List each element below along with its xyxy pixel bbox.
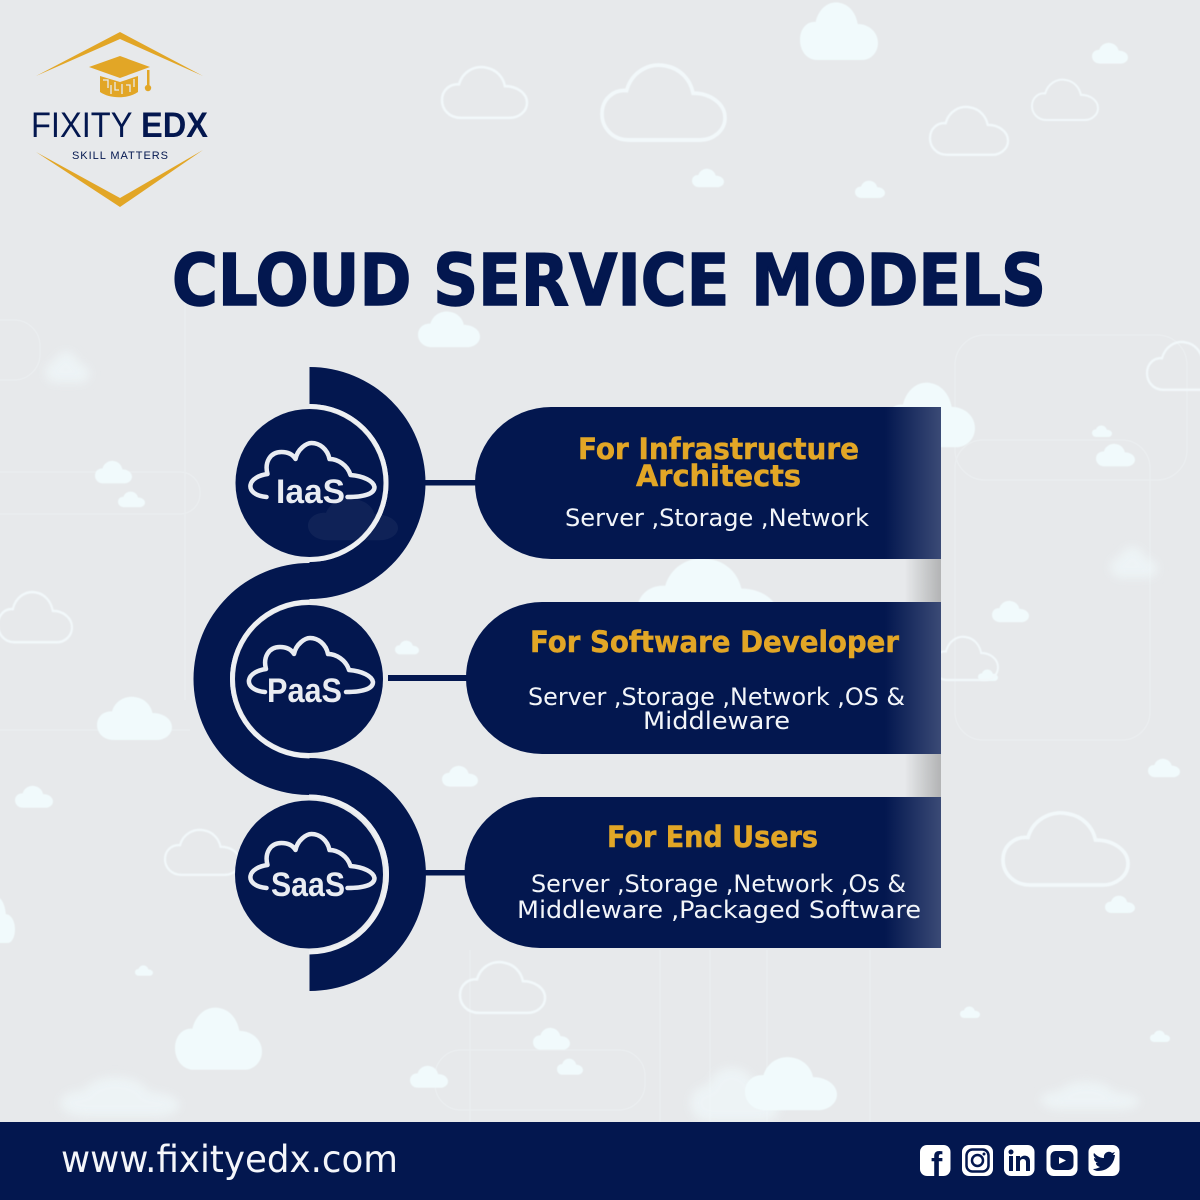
- footer bar: [0, 1122, 1200, 1200]
- logo: Fixity EDX: [31, 32, 209, 207]
- icon: twitter: [1088, 1145, 1120, 1176]
- card highlight: [885, 602, 941, 754]
- panel: end users: [464, 797, 941, 948]
- SaaS cloud icon: [250, 834, 374, 888]
- IaaS label: IaaS: [276, 473, 345, 511]
- SaaS label: SaaS: [271, 866, 345, 904]
- icon: facebook: [920, 1145, 950, 1184]
- PaaS ring: [232, 602, 309, 756]
- logo: wordmark: FIXITY EDX: [31, 106, 209, 145]
- step: PaaS: [232, 602, 383, 756]
- logo: gold emblem: [36, 32, 203, 207]
- icon: linkedin: [1004, 1145, 1034, 1176]
- website url: www.fixityedx.com: [61, 1138, 398, 1181]
- card highlight: [885, 407, 941, 559]
- PaaS label: PaaS: [267, 672, 342, 710]
- card text: Middleware: [643, 707, 790, 735]
- card heading: For End Users: [607, 820, 818, 854]
- IaaS ring: [310, 406, 386, 560]
- panel: software developer: [466, 602, 941, 754]
- card shape: [466, 602, 941, 754]
- step: IaaS: [236, 406, 398, 560]
- card glass cloud: [637, 558, 778, 639]
- PaaS cloud icon: [249, 638, 373, 692]
- panel: infrastructure architects: [475, 407, 941, 559]
- logo: tagline: SKILL MATTERS: [72, 150, 168, 162]
- PaaS circle: [235, 605, 383, 753]
- icon: facebook: f: [931, 1146, 943, 1184]
- S-curve ribbon: [194, 367, 426, 991]
- icon: youtube: [1046, 1145, 1078, 1176]
- card highlight: [885, 797, 941, 948]
- card heading: For Infrastructure: [578, 432, 859, 466]
- connector lines: [388, 480, 478, 876]
- card heading: Architects: [636, 459, 801, 493]
- card text: Server ,Storage ,Network: [565, 504, 869, 532]
- SaaS ring: [309, 796, 387, 952]
- card shape: [464, 797, 941, 948]
- card text: Server ,Storage ,Network ,Os &: [531, 870, 906, 898]
- card text: Middleware ,Packaged Software: [517, 896, 921, 924]
- IaaS glass cloud: [308, 499, 398, 540]
- icon: instagram: [962, 1145, 993, 1176]
- shadow strips at right of cards: [905, 559, 941, 797]
- card text: Server ,Storage ,Network ,OS &: [528, 683, 905, 711]
- step: SaaS: [235, 796, 387, 952]
- card heading: For Software Developer: [530, 625, 900, 659]
- IaaS cloud icon: [250, 443, 374, 497]
- IaaS circle: [236, 409, 384, 557]
- card shape: [475, 407, 941, 559]
- title: CLOUD SERVICE MODELS: [172, 239, 1046, 322]
- SaaS circle: [235, 800, 383, 948]
